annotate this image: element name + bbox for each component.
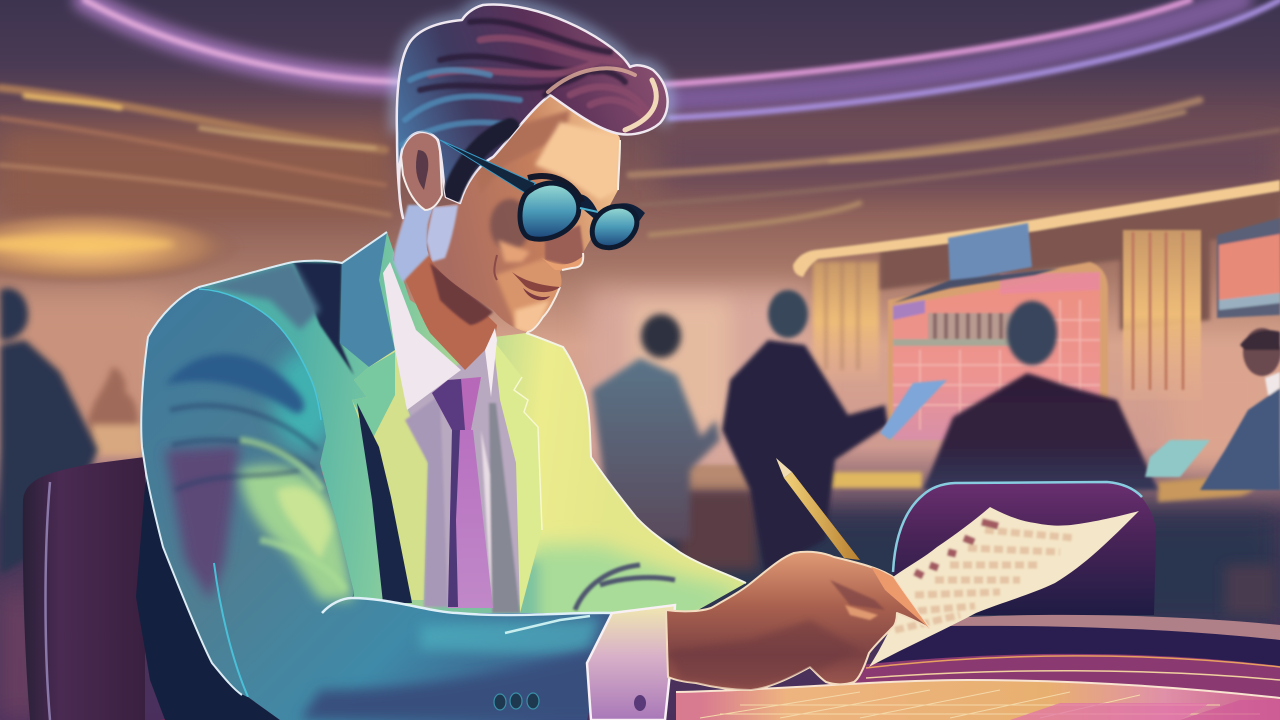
- right gold column: [1123, 230, 1201, 400]
- blue collar lapel: [340, 232, 395, 367]
- dark table edge: [866, 626, 1280, 668]
- sleeve with folds: [130, 280, 630, 720]
- hair: [397, 4, 668, 218]
- forearm crease shadows: [575, 565, 675, 610]
- shirt collar: [383, 262, 461, 410]
- torso of jacket: [202, 232, 746, 613]
- dark blue shoulder swoosh: [165, 354, 304, 413]
- wooden counter base: [678, 490, 1275, 615]
- lower face: [495, 258, 562, 332]
- quiff highlights: [548, 68, 635, 92]
- sleeve crease strokes: [170, 406, 318, 490]
- right side board: [1217, 218, 1280, 318]
- bookmaker counter and boards: [793, 180, 1280, 440]
- background person seated: [923, 301, 1158, 490]
- finger shadow: [830, 580, 885, 610]
- knuckle shade: [670, 620, 860, 690]
- sleeve buttons: [494, 693, 539, 710]
- dark shoulder patch: [293, 262, 354, 375]
- forearm upper highlight: [322, 598, 612, 615]
- dark jacket lining: [136, 473, 280, 720]
- background person grey suit: [592, 314, 720, 540]
- dark strands: [420, 21, 625, 95]
- pale jaw highlight: [426, 205, 458, 262]
- forearm glint: [505, 616, 590, 633]
- shirt front: [405, 345, 522, 613]
- slip red markers: [915, 522, 998, 576]
- golden ceiling lamp: [0, 209, 243, 285]
- smile line: [494, 255, 497, 280]
- blue strands: [402, 70, 520, 145]
- background person dark suit: [722, 290, 888, 572]
- teal shoulder glow: [273, 350, 337, 450]
- blue overhead screen: [893, 223, 1060, 303]
- left gold column: [813, 262, 879, 382]
- thumb: [870, 565, 929, 628]
- green lapel notch: [352, 350, 428, 600]
- counter tops: [678, 465, 1257, 502]
- torso right outline: [526, 333, 746, 583]
- dark temple: [452, 128, 510, 195]
- sleeve inner highlight line: [214, 563, 248, 697]
- purple sleeve shade: [165, 445, 240, 600]
- curtains behind people: [630, 300, 730, 430]
- sunglasses: [440, 140, 645, 248]
- table rail: [945, 615, 1280, 642]
- green fold highlight: [240, 466, 354, 600]
- table edge near the left of the sleeve: [160, 697, 290, 720]
- curved cream ceiling bar: [793, 180, 1280, 277]
- shirt cuff: [587, 605, 675, 720]
- blue paper in his hand: [880, 380, 947, 440]
- right chair: [893, 482, 1156, 615]
- wall above boards: [880, 190, 1280, 330]
- amber ceiling light trails: [0, 88, 1280, 235]
- neck highlight: [393, 205, 437, 282]
- man: [130, 4, 760, 720]
- cufflink: [634, 695, 646, 711]
- neck: [393, 207, 497, 370]
- soft glow around the head: [397, 4, 668, 133]
- forearm shadow: [300, 650, 600, 720]
- neck shadow: [430, 263, 493, 325]
- main odds board: [888, 262, 1108, 440]
- ear: [400, 128, 442, 210]
- pencil: [776, 458, 860, 560]
- maroon table band: [800, 654, 1280, 700]
- dark jacket opening strip: [357, 403, 412, 603]
- ceiling neon arcs: [85, 0, 1280, 118]
- background person right: [1200, 328, 1280, 490]
- left chair: [23, 457, 145, 720]
- forehead shade: [488, 109, 572, 178]
- shoulder seam: [199, 289, 321, 420]
- purple tie: [432, 377, 493, 608]
- felt betting layout: [676, 680, 1280, 720]
- quiff edge highlight: [625, 80, 656, 130]
- lit cheek: [498, 240, 530, 262]
- teal tablet on the counter: [1145, 440, 1210, 477]
- lapel edge stroke: [514, 377, 542, 530]
- slip grid rows: [895, 530, 1075, 630]
- casino table: [676, 615, 1280, 720]
- cheek shadow under lens: [490, 199, 530, 251]
- betting slip: [869, 507, 1139, 667]
- hand holding the slip: [666, 552, 929, 690]
- nose: [545, 225, 585, 266]
- far left distant figure and table: [88, 367, 142, 455]
- face outline: [527, 140, 620, 332]
- yellow right lapel: [493, 340, 542, 613]
- background person far left: [0, 288, 98, 575]
- forearm teal highlight: [420, 618, 600, 654]
- lower forearm green: [532, 534, 743, 613]
- sleeve outline: [141, 232, 387, 695]
- mouth: [512, 272, 560, 300]
- maroon strands: [430, 38, 650, 118]
- face: [426, 96, 620, 332]
